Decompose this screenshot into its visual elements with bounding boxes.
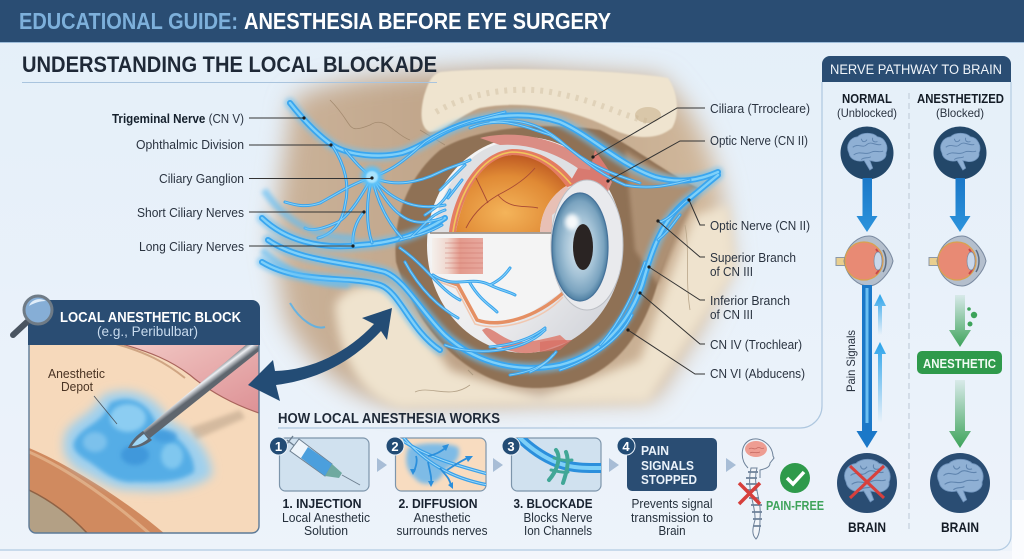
label: short ciliary nerves: [137, 205, 366, 220]
panel header: [822, 56, 1011, 82]
label: inferior branch: [647, 265, 790, 322]
label: superior branch: of CN III: [710, 264, 753, 279]
step 1 injection: [270, 436, 369, 491]
ciliary ganglion: [361, 166, 383, 188]
label: CN IV: [638, 291, 802, 352]
icon: syringe: [286, 436, 360, 485]
title: [19, 8, 611, 34]
label: ciliara: [591, 101, 810, 159]
arrow between steps 3 and 4: [609, 458, 619, 472]
arrow: green dotted to label: [949, 295, 977, 347]
inferior muscle: [482, 328, 568, 353]
icon: eye: [929, 236, 986, 286]
badge 4: 4: [622, 439, 630, 454]
label: superior branch: [656, 219, 796, 279]
main panel border: [278, 82, 822, 428]
panel: local anesthetic block: LOCAL ANESTHETIC BLOCK: [60, 310, 241, 326]
column: normal: (Unblocked): [837, 106, 897, 120]
column: anesthetized: (Blocked): [936, 106, 984, 120]
step 3 caption: Blocks Nerve: [524, 511, 593, 525]
step 4 pain signals stopped: PAIN: [641, 443, 669, 458]
arrow: brain to eye: [950, 178, 970, 232]
cornea and iris: [551, 180, 623, 310]
label: trigeminal nerve: Trigeminal Nerve (CN V): [112, 111, 244, 126]
arrow between steps 2 and 3: [493, 458, 503, 472]
step 2 caption: [396, 496, 488, 538]
label: anesthetic depot: [48, 367, 117, 424]
anesthetic depot cloud: [64, 391, 212, 491]
step 2 diffusion: [386, 437, 488, 491]
right nerve labels: [591, 101, 810, 381]
icon: brain top: [934, 126, 986, 180]
step 2 caption: Anesthetic: [414, 511, 470, 525]
panel header: NERVE PATHWAY TO BRAIN: [830, 62, 1002, 77]
step 4 caption: Brain: [658, 524, 686, 538]
step 1 caption: Solution: [304, 524, 348, 538]
icon: head and spine: [739, 439, 774, 539]
label: inferior branch: Inferior Branch: [710, 293, 790, 308]
label: long ciliary nerves: Long Ciliary Nerves: [139, 239, 244, 254]
step 4 pain signals stopped: STOPPED: [641, 472, 697, 487]
label: anesthetic: [917, 351, 1002, 374]
left nerve labels: [112, 111, 374, 254]
step 4 caption: [631, 497, 713, 538]
label: ciliary ganglion: [159, 171, 374, 186]
label: anesthetic depot: Anesthetic: [48, 367, 105, 381]
retina cavity: [456, 155, 566, 232]
arrow: signal to brain: [856, 285, 878, 448]
step 3 caption: Ion Channels: [524, 524, 592, 538]
nerves over eye and orbit: [262, 103, 718, 375]
label: anesthetic depot: Depot: [61, 380, 94, 394]
label: inferior branch: of CN III: [710, 307, 753, 322]
arrow: brain to eye: [856, 178, 878, 232]
arrow: double-headed link from inset to eye: [248, 308, 392, 401]
label: pain signals: Pain Signals: [844, 330, 858, 392]
arrows: pain signals up: [874, 294, 886, 423]
arrow to spine: [726, 458, 736, 472]
title: EDUCATIONAL GUIDE:: [19, 8, 238, 34]
arrow between steps 1 and 2: [377, 458, 387, 472]
label: ophthalmic division: Ophthalmic Division: [136, 137, 244, 152]
label: short ciliary nerves: Short Ciliary Nerves: [137, 205, 244, 220]
icon: brain top: [840, 126, 894, 180]
badge 2: 2: [391, 439, 399, 454]
column: normal: NORMAL: [842, 92, 892, 106]
label: CN VI: [626, 328, 805, 381]
needle: [128, 344, 259, 448]
column: anesthetized: BRAIN: [941, 519, 979, 535]
panel: nerve pathway to brain: [822, 56, 1011, 535]
label: optic nerve upper: Optic Nerve (CN II): [710, 133, 808, 148]
orbit bone backdrop: [272, 68, 735, 408]
eyeball: [427, 135, 623, 353]
section: how local anesthesia works: [270, 411, 824, 539]
lower sclera block: [429, 232, 560, 322]
arrow: green to brain: [949, 380, 971, 448]
icon: pain-free check: PAIN-FREE: [766, 499, 824, 513]
step 4 pain signals stopped: SIGNALS: [641, 458, 694, 473]
icon: magnifying glass: [13, 296, 52, 335]
step 3 caption: [514, 496, 593, 538]
anatomy illustration: eye in orbit with nerves: [262, 68, 735, 408]
step 2 caption: 2. DIFFUSION: [398, 496, 478, 511]
label: CN VI: CN VI (Abducens): [710, 366, 805, 381]
label: anesthetic: ANESTHETIC: [923, 357, 996, 371]
horizontal rectus muscle: [432, 238, 483, 274]
label: superior branch: Superior Branch: [710, 250, 796, 265]
label: long ciliary nerves: [139, 239, 355, 254]
subtitle: UNDERSTANDING THE LOCAL BLOCKADE: [22, 52, 437, 77]
step 3 caption: 3. BLOCKADE: [514, 496, 593, 511]
panel: local anesthetic block: (e.g., Peribulbar): [97, 324, 198, 339]
step 3 blockade: [502, 436, 604, 491]
label: ophthalmic division: [136, 137, 333, 152]
panel: local anesthetic block: [28, 300, 260, 534]
header bar: [0, 0, 1024, 43]
nerves behind eye: [262, 103, 718, 368]
column: normal: BRAIN: [848, 519, 886, 535]
label: optic nerve lower: Optic Nerve (CN II): [710, 218, 810, 233]
column: normal: [836, 92, 897, 535]
icon: eye: [836, 236, 893, 286]
label: ciliary ganglion: Ciliary Ganglion: [159, 171, 244, 186]
step 4 caption: transmission to: [631, 511, 713, 525]
label: optic nerve lower: [687, 198, 810, 233]
column: anesthetized: [917, 92, 1004, 535]
step 1 caption: [282, 496, 370, 538]
column: anesthetized: ANESTHETIZED: [917, 92, 1004, 106]
icon: blocked brain: [837, 453, 897, 513]
nerve clamp: [549, 450, 572, 483]
step 4 caption: Prevents signal: [632, 497, 712, 511]
inset illustration: [29, 344, 259, 534]
badge 3: 3: [507, 439, 515, 454]
red muscle tuft: [570, 150, 610, 192]
heading: HOW LOCAL ANESTHESIA WORKS: [278, 411, 500, 427]
title: ANESTHESIA BEFORE EYE SURGERY: [244, 8, 611, 34]
icon: pain-free check: [766, 463, 824, 513]
badge 1: 1: [275, 439, 282, 454]
label: CN IV: CN IV (Trochlear): [710, 337, 802, 352]
label: ciliara: Ciliara (Trrocleare): [710, 101, 810, 116]
icon: brain bottom: [930, 453, 990, 513]
step 1 caption: 1. INJECTION: [282, 496, 362, 511]
step 1 caption: Local Anesthetic: [282, 511, 370, 525]
panel header: [28, 300, 260, 345]
step 2 caption: surrounds nerves: [396, 524, 488, 538]
step 4 pain signals stopped: [617, 437, 717, 491]
label: optic nerve upper: [606, 133, 808, 183]
